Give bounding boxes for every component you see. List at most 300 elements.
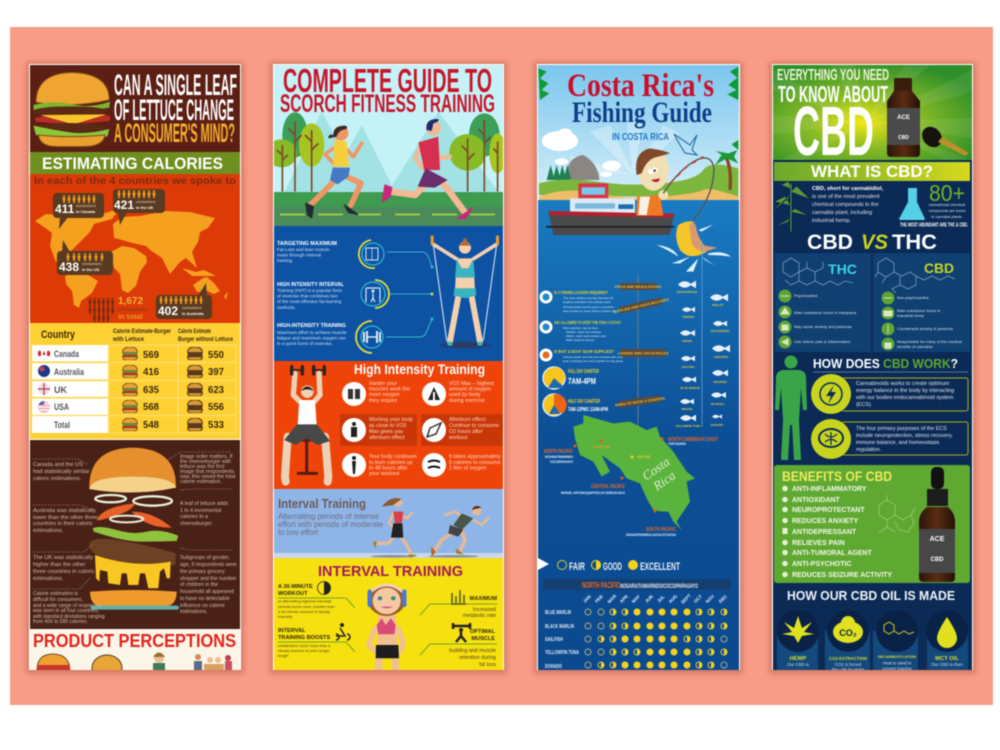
illustration: CBD oil bottle: ACE <box>930 536 945 543</box>
title: COMPLETE GUIDE TO <box>283 62 492 99</box>
labels: timeline pills: SUPPLIES AND GEAR INCLUDED <box>613 298 670 314</box>
stat: 80+: cannabinoid chemical <box>929 203 965 207</box>
text block: training descriptions: Fat Loss and lean muscle <box>277 247 330 252</box>
callout: US 438: consumers <box>82 261 102 266</box>
heading: how does CBD work: HOW DOES CBD WORK? <box>813 357 958 371</box>
illustration: amber bottle and dropper: ACE <box>897 115 910 121</box>
list: benefits: RELIEVES PAIN <box>792 540 845 547</box>
text block: burger findings left: estimations. <box>33 576 64 582</box>
text block: high intensity facts: afterburn effect <box>369 435 405 441</box>
text block: burger findings right: cheeseburger. <box>180 521 213 527</box>
text block: training descriptions: methods. <box>277 305 296 310</box>
title: EVERYTHING YOU NEED <box>777 67 889 84</box>
stat: 80+: THE MOST ABUNDANT ARE THC & CBD. <box>900 222 968 228</box>
icons: fish species column: SNAPPER <box>713 380 727 384</box>
title: Fishing Guide <box>572 96 712 129</box>
icons: fish species column: DORADO <box>711 423 724 427</box>
text block: FAQ items <box>540 290 624 363</box>
text block: high intensity facts: more oxygen <box>369 392 400 398</box>
chart: North Pacific fishing calendar: FEB <box>594 593 604 604</box>
step labels: HEMP <box>790 656 807 662</box>
callout: Australia 402: in Australia <box>182 311 204 316</box>
stat: 80+ <box>900 180 968 228</box>
text block: burger findings left: Calorie estimation is <box>33 591 79 597</box>
panel: THC: THC <box>828 261 857 277</box>
callout: total 1,672: 1,672 <box>118 296 143 307</box>
title: SCORCH FITNESS TRAINING <box>280 90 495 118</box>
text block: burger findings left: Canada and the US <box>33 462 83 468</box>
step text: Heat is used to <box>883 660 912 666</box>
text block: FAQ items: The crew obtains one-day licenses for <box>563 296 614 300</box>
panel: benefits of CBD <box>774 465 970 583</box>
chart: North Pacific fishing calendar: BLACK MARLIN <box>545 624 574 630</box>
text block: high intensity facts: they require <box>369 398 397 404</box>
process: four steps <box>777 610 968 672</box>
text block: FAQ items: anglers included in the charter price. <box>563 300 612 304</box>
callout: Australia 402: consumers <box>182 305 202 310</box>
step text: Our CBD is <box>787 662 809 667</box>
text block: left: a 90-minute workout of steady <box>278 609 330 614</box>
text block: high intensity facts <box>369 381 501 477</box>
title <box>567 68 714 129</box>
text block: right: Increased <box>473 607 496 613</box>
text block: high intensity facts: during exercise <box>449 398 485 404</box>
text block: training descriptions: HIGH INTENSITY INTERVAL <box>277 282 345 288</box>
table rows: UK <box>54 385 67 395</box>
illustration: cartoon fisherman <box>636 148 714 220</box>
step labels: MCT OIL <box>935 656 959 662</box>
stat: 80+: compounds are found <box>929 209 965 213</box>
chart: half day charter pie: HALF DAY CHARTER <box>568 399 600 405</box>
icons: workout glyphs <box>318 582 470 642</box>
list: benefits: ANTI-PSYCHOTIC <box>792 561 852 568</box>
stat: 80+: in cannabis plants. <box>931 215 963 219</box>
molecule <box>875 258 955 293</box>
list: benefits: REDUCES ANXIETY <box>792 518 859 525</box>
map: Costa Rica: Costa <box>639 453 673 483</box>
table rows: 569 <box>143 350 159 361</box>
text block: burger findings right: image that respondents <box>180 469 235 475</box>
heading: High Intensity Training <box>354 362 485 377</box>
table rows: 550 <box>208 350 224 361</box>
title: Costa Rica's <box>567 68 714 104</box>
text block: burger findings right: Subgroups of gender, <box>180 555 230 561</box>
labels: timeline pills <box>612 283 670 408</box>
text block: burger findings left: estimations. <box>33 528 64 534</box>
molecule <box>783 258 853 285</box>
illustration: amber bottle and dropper <box>887 78 969 157</box>
divider line: fish column <box>701 240 703 427</box>
chart: North Pacific fishing calendar: NORTH PACIFIC <box>582 581 620 590</box>
callout: Australia 402 <box>156 283 212 319</box>
icons: white circles <box>342 382 446 477</box>
labels: timeline pills: PRICE AND REGULATIONS <box>615 285 662 289</box>
panel: burger calories infographic <box>30 65 240 681</box>
text block: high intensity facts: O2 hours after <box>449 429 483 435</box>
text block: high intensity facts: muscles work the <box>369 386 410 392</box>
icon: oil drop <box>937 617 957 648</box>
icon: flask <box>899 188 925 220</box>
callout: US 438 <box>57 240 113 275</box>
text block: burger findings right: of children in the <box>180 582 218 588</box>
icon: hemp leaf <box>782 616 814 643</box>
callout: total 1,672: consumers <box>118 307 147 313</box>
list: THC properties: Main substance found in marijuana <box>794 310 857 315</box>
callout: UK 421: 421 <box>114 198 134 212</box>
timeline: central and right lines <box>637 275 639 452</box>
icons: fish species column: DOLPHINFISH <box>711 329 729 333</box>
panel: interval training blue: Interval Training <box>278 497 366 511</box>
illustration: fishing boat <box>546 183 674 235</box>
list: CBD properties <box>882 292 962 350</box>
icons: perception illustrations <box>36 652 233 671</box>
step labels <box>790 655 959 662</box>
text block: burger findings left: with standard deviations ranging <box>33 614 105 620</box>
chart: full day charter pie: 7AM-4PM <box>568 376 596 386</box>
illustration: man with dumbbells <box>284 367 330 482</box>
panel: scorch fitness training <box>266 62 506 675</box>
heading: CBD vs THC: VS <box>861 231 888 254</box>
text block: right: retention during <box>459 655 496 661</box>
text block: burger findings right: shopper and the number <box>180 576 237 582</box>
text block: high intensity facts: Your body continues <box>369 454 417 460</box>
molecule <box>878 495 915 533</box>
table rows: 397 <box>208 367 224 378</box>
chart: North Pacific fishing calendar: AUG <box>668 593 679 604</box>
text block: Alternating periods of intense <box>278 512 379 521</box>
list: CBD properties: Main substance found in <box>897 308 940 313</box>
panel: world map <box>30 174 240 323</box>
illustration: male runner <box>382 119 472 218</box>
text block: left: length <box>278 653 289 658</box>
title <box>280 68 495 113</box>
text block: FAQ items: Fishing tackle and bait are included with your <box>563 355 623 359</box>
text block: left: steady workout of even longer <box>278 648 331 653</box>
text block: high intensity facts: It takes approximately <box>449 454 501 460</box>
list: CBD properties: industrial hemp <box>897 313 925 318</box>
heading: what is CBD: WHAT IS CBD? <box>811 162 933 181</box>
list: THC properties: Can relieve pain & inflammation <box>794 339 850 344</box>
panel: interval training blue <box>274 489 503 558</box>
panel: interval training yellow: INTERVAL TRAINING <box>318 563 463 580</box>
title: TO KNOW ABOUT <box>778 81 888 107</box>
icons: fish species column: TARPON <box>682 315 694 319</box>
list: benefits: ANTIDEPRESSANT <box>792 529 857 536</box>
list: benefits <box>792 486 892 579</box>
text block: effort with periods of moderate <box>278 520 383 529</box>
text block: left: TRAINING BOOSTS <box>278 635 330 641</box>
table rows: 416 <box>143 367 159 378</box>
icons: fish species column: MULLET <box>712 303 724 307</box>
callout: endocannabinoid balance: energy balance in the body by interacting <box>856 388 954 394</box>
text block: CBD definition: cannabis plant, including <box>812 210 872 216</box>
chart: North Pacific fishing calendar <box>543 579 731 670</box>
map: Costa Rica: Rica <box>649 467 679 494</box>
illustration: amber bottle and dropper: CBD <box>898 135 909 141</box>
text block: burger findings right: influence on calorie <box>180 603 225 609</box>
text block: high intensity facts: to 48 hours after <box>369 466 408 472</box>
list: benefits: ANTI-TUMORAL AGENT <box>792 550 872 557</box>
text block: burger findings left: from 406 to 586 calories. <box>33 619 88 625</box>
map: Costa Rica: NORTH PACIFIC <box>544 449 573 455</box>
icons: fish species column: SAILFISH <box>682 365 694 369</box>
callout: ECS purposes: The four primary purposes of the ECS <box>856 426 947 432</box>
text block: training descriptions: of exercise that combines two <box>277 294 338 298</box>
text block: FAQ items: Sailfish: catch and release <box>566 330 601 334</box>
icon: CO2 cloud <box>833 616 863 643</box>
text block: high intensity facts: amount of oxygen <box>449 386 491 392</box>
callout: endocannabinoid balance: Cannabinoids works to create optimum <box>856 381 950 387</box>
text block: burger findings right: calorie estimation. <box>180 479 222 485</box>
chart: North Pacific fishing calendar: JUN <box>644 594 654 604</box>
map: Costa Rica: DRAKE/PENINSULA/GOLFITO/OSA <box>626 533 676 537</box>
map: Costa Rica: SAN JOSE <box>637 454 650 459</box>
text block: burger findings left: had statistically similar <box>33 469 90 475</box>
text block: high intensity facts: Harder your <box>369 381 397 387</box>
text block: high intensity facts: used by body <box>449 392 481 398</box>
callout lines <box>33 452 232 589</box>
step text: Our CBD is then <box>931 662 963 667</box>
table header: Burger without Lettuce <box>178 337 234 343</box>
text block: high intensity facts: Continue to consume <box>449 423 499 429</box>
icons: benefit bullets <box>782 486 788 577</box>
chart: North Pacific fishing calendar: YELLOWFIN TUNA <box>545 650 579 656</box>
callout: total 1,672: in total <box>118 312 143 321</box>
text block: right: OPTIMAL <box>470 629 496 635</box>
text block: FAQ items: boat, including line and supplies for big game. <box>563 359 624 363</box>
text block: left: A 30-MINUTE <box>278 584 313 590</box>
text block: right: building and muscle <box>449 648 496 654</box>
chart: North Pacific fishing calendar: SEPT <box>680 593 692 605</box>
callout: endocannabinoid balance: with our bodies endocannabinoid system <box>855 395 954 401</box>
text block: high intensity facts: Max gives you <box>369 429 403 435</box>
step text: convert inactive <box>882 666 913 671</box>
labels: timeline pills: WHEN TO BOOK A CHARTER <box>615 396 666 408</box>
text block: high intensity facts: VO2 Max – highest <box>449 381 495 387</box>
illustration: woman with resistance bands <box>431 236 499 348</box>
text block: FAQ items: All boat tackle and fly gear is provided <box>563 305 614 309</box>
title <box>777 67 889 170</box>
text block: high intensity facts: 1 liter of oxygen <box>449 466 486 472</box>
text block: left: metabolism much more than a <box>278 643 331 648</box>
text block: training descriptions: fatigue and maximum oxygen use <box>277 336 346 340</box>
text: A CONSUMER'S MIND? <box>114 118 235 148</box>
panel: high intensity training <box>274 361 503 489</box>
callout: Canada 411 <box>53 193 104 229</box>
table header: with Lettuce <box>112 337 145 343</box>
table rows: 533 <box>208 420 224 431</box>
list: CBD properties: Non-psychoactive <box>897 295 930 300</box>
text block: high intensity facts: Working your body <box>369 417 413 423</box>
panel: THC <box>775 253 871 352</box>
text block: burger findings right: estimations. <box>180 609 208 615</box>
icons: fish species column: GROUPER <box>714 355 728 359</box>
chart: North Pacific fishing calendar: SAILFISH <box>545 637 563 643</box>
map: Costa Rica: CENTRAL PACIFIC <box>591 484 625 490</box>
table rows <box>32 345 236 433</box>
chart: full day charter pie <box>543 367 599 389</box>
icon: hero burger <box>33 72 110 147</box>
text block <box>278 512 383 537</box>
callout: ECS purposes: immune balance, and homeostasis <box>856 440 940 446</box>
callout: US 438: 438 <box>59 260 79 274</box>
text block: left: WORKOUT <box>278 591 308 597</box>
illustration: road <box>274 192 503 226</box>
callout: US 438: in the US <box>82 267 100 272</box>
text block: CBD definition: is one of the most prevalent <box>812 194 880 200</box>
icons: fish species column <box>675 281 730 428</box>
text block: FAQ items: IS A FISHING LICENSE REQUIRED? <box>554 290 608 295</box>
table rows: 556 <box>208 402 224 413</box>
text block: training descriptions: training <box>277 258 293 263</box>
text block: training descriptions: Training (HIIT) is a popular form <box>277 288 342 293</box>
icons: ring badges with connectors <box>356 240 434 353</box>
step text: thru oils by strain <box>832 667 865 672</box>
panel: product perceptions: PRODUCT PERCEPTIONS <box>33 631 236 651</box>
text block: burger findings right: the cheeseburger with <box>180 459 231 465</box>
map: Costa Rica: TORTUGUERO <box>668 442 686 446</box>
callout: Australia 402: 402 <box>158 304 178 318</box>
heading: what is CBD <box>774 162 970 181</box>
text block: training descriptions: mass through interval <box>277 252 321 258</box>
text block: to low effort <box>278 528 319 537</box>
illustration: jumping fish and splash <box>657 221 731 272</box>
table rows: Australia <box>54 367 85 377</box>
text block: burger findings right: to have no detectable <box>180 596 230 602</box>
text block: left: of alternating high/low intensity <box>278 598 331 604</box>
panel: product perceptions <box>30 629 240 671</box>
illustration: sun rays, clouds and coast <box>538 67 738 200</box>
legend: fishing quality: FAIR <box>569 561 585 573</box>
list: THC properties: Psychoactive <box>794 293 818 298</box>
chart: North Pacific fishing calendar: BLUE MARLIN <box>545 610 571 616</box>
text block: CBD definition: industrial hemp. <box>812 218 851 224</box>
callout: total 1,672 <box>89 296 147 322</box>
text block: FAQ items: Marlin: catch and release only <box>566 334 606 338</box>
text block: left <box>278 584 335 658</box>
illustration: mountains and trees <box>266 112 506 192</box>
table rows: 548 <box>143 420 159 431</box>
callout: Canada 411: 411 <box>55 202 75 216</box>
callout: endocannabinoid balance: (ECS). <box>856 402 872 408</box>
illustration: CBD oil bottle <box>919 467 955 582</box>
text block: high intensity facts: your workout <box>369 471 400 477</box>
heading: CBD vs THC: THC <box>892 231 937 254</box>
icons: fish species column: BLUEGILL <box>711 402 725 406</box>
map: Costa Rica: LA FORTUNA <box>592 444 610 449</box>
table rows: 568 <box>143 402 159 413</box>
text block: high intensity facts: as close to VO2 <box>369 423 406 429</box>
text block: burger findings right: Image order matters. If <box>180 454 233 460</box>
text block: high intensity facts: 5 calories to consume <box>449 460 501 466</box>
panel: CBD: CBD <box>924 260 954 276</box>
text block: right: fat loss <box>479 662 496 668</box>
text block: high intensity facts: Afterburn effect: <box>449 417 487 423</box>
text: OF LETTUCE CHANGE <box>114 94 234 127</box>
callout: Canada 411: in Canada <box>76 209 96 214</box>
step text <box>787 660 963 672</box>
text block: training descriptions: HIGH-INTENSITY TRAINING <box>277 323 346 329</box>
text block: burger findings left: caloric estimations. <box>33 476 82 482</box>
panel: CBD <box>873 253 970 352</box>
text block: right: metabolic rate <box>463 613 496 619</box>
text block: burger findings left: three countries in caloric <box>33 569 95 575</box>
text block: burger findings right: saw, this raised the total <box>180 474 235 480</box>
step labels: DECARBOXYLATION <box>878 655 916 659</box>
text block: burger findings right: lettuce was the first <box>180 464 225 470</box>
illustration: two sprinters <box>371 498 488 558</box>
text block: burger findings left: higher than the other <box>33 562 86 568</box>
table rows: USA <box>54 402 69 412</box>
text block: burger findings left: lower than the other three <box>33 515 98 521</box>
legend: fishing quality <box>538 558 680 573</box>
text block: CBD definition: chemical compounds in the <box>812 202 879 208</box>
table: calorie estimates <box>30 323 240 439</box>
list: benefits: ANTI-INFLAMMATORY <box>792 486 867 493</box>
callout: UK 421 <box>113 189 165 225</box>
table header: Country <box>41 329 76 341</box>
map: Costa Rica: /COCO/PAPAGAYO <box>550 460 573 464</box>
text block: right: MAXIMUM <box>470 596 497 602</box>
illustration: woman with headphones <box>368 584 405 675</box>
chart: North Pacific fishing calendar: OCT <box>693 594 703 604</box>
text block: training descriptions: Maximum effort to achieve muscle <box>277 330 347 335</box>
map: Costa Rica: NOSARA/TAMARINDO <box>545 455 573 459</box>
callout: UK 421: in the UK <box>136 205 154 210</box>
map: Costa Rica <box>544 415 718 537</box>
heading: CBD vs THC <box>807 231 937 254</box>
icon: molecule <box>884 622 914 634</box>
text block: high intensity facts: to burn calories up <box>369 460 413 466</box>
text block: CBD definition <box>812 186 884 224</box>
illustration: CBD oil bottle: CBD <box>930 557 944 563</box>
list: benefits: ANTIOXIDANT <box>792 497 841 504</box>
text block: burger findings right: A leaf of lettuce adds <box>180 501 229 507</box>
map: continents <box>35 208 228 308</box>
text block: burger findings right <box>180 454 237 615</box>
text block: burger findings right: the primary grocery <box>180 569 225 575</box>
icons: fish species column: BLUE MARLIN <box>680 386 700 390</box>
map: Costa Rica: MANUEL ANTONIO/QUEPOS/LOS SUENOS/JACO <box>561 491 625 495</box>
heading: estimating calories: ESTIMATING CALORIES <box>42 154 223 173</box>
text block: left: INTERVAL <box>278 628 306 634</box>
chart: North Pacific fishing calendar: NOSARA/TAMARINDO/COCO/PAPAGAYO <box>620 584 698 590</box>
text block: burger findings left <box>33 462 105 625</box>
title: CBD <box>793 92 874 170</box>
step text: CO2 is forced <box>835 662 862 667</box>
icons: fish species column: ROOSTERFISH <box>677 290 697 294</box>
title <box>114 74 238 143</box>
text block: FAQ items: Mahi: fresh for dinner <box>566 338 594 342</box>
chart: half day charter pie <box>543 394 608 416</box>
stat: 80+: 80+ <box>929 180 965 206</box>
icon: CO2 cloud: CO₂ <box>839 628 857 638</box>
legend: fishing quality: GOOD <box>603 561 622 573</box>
callout: endocannabinoid balance <box>811 374 968 414</box>
icons: fish species column: SNOOK <box>682 339 692 343</box>
table rows: Canada <box>54 349 80 359</box>
chart: North Pacific fishing calendar: MAR <box>607 593 618 604</box>
chart: full day charter pie: FULL DAY CHARTER <box>568 369 599 375</box>
labels: timeline pills: LICENSE AND CATCH RULES <box>618 352 669 356</box>
list: benefits: REDUCES SEIZURE ACTIVITY <box>792 572 892 579</box>
text block: training descriptions: TARGETING MAXIMUM <box>277 241 338 247</box>
heading: how our CBD oil is made: HOW OUR CBD OIL IS MADE <box>787 589 955 603</box>
table rows: Total <box>54 420 70 430</box>
table header: Calorie Estimate <box>178 329 211 335</box>
table rows: 635 <box>143 385 159 396</box>
illustration: female runner <box>306 126 362 218</box>
